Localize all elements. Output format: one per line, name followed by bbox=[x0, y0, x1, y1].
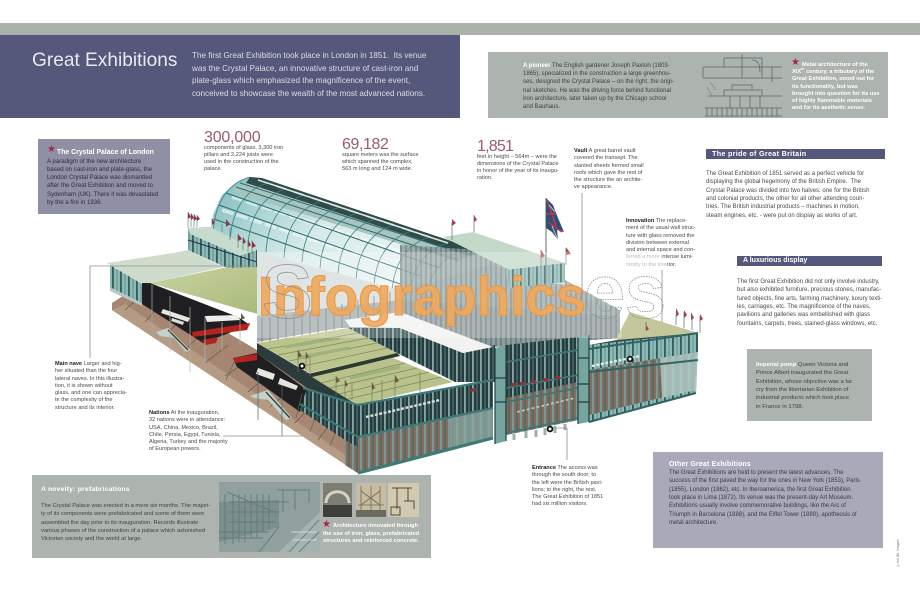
intro text: The first Great Exhibition took place in London in 1851. Its venue bbox=[192, 51, 426, 60]
wedge between roof and left interior bbox=[257, 343, 357, 405]
number: 300,000 bbox=[204, 128, 260, 146]
left wing roofs bbox=[107, 250, 258, 314]
panel text: Triumph in Barcelona (1888), and the Eiffel Tower (1889), apotheosis of bbox=[669, 512, 857, 518]
watermark text bbox=[258, 250, 666, 335]
metal architecture caption: of highly flammable materials bbox=[792, 98, 872, 104]
left tower bbox=[495, 345, 506, 444]
text: a luxurious display: fountains, carpets, trees, stained-glass windows, etc. bbox=[737, 321, 877, 327]
note: nations: USA, China, Mexico, Brazil, bbox=[149, 425, 218, 431]
note: nations: Chile, Persia, Egypt, Tunisia, bbox=[149, 432, 221, 438]
description: which spanned the complex, bbox=[342, 159, 413, 165]
panel text: (1855), London (1862), etc. In Iberoamerica, the first Great Exhibition bbox=[669, 487, 851, 493]
panel heading: The Crystal Palace of London bbox=[57, 149, 154, 156]
panel text: various phases of the construction of a palace which astonished bbox=[41, 528, 205, 534]
intro text: conceived to showcase the wealth of the most advanced nations. bbox=[192, 89, 425, 98]
panel text: Sydenham (UK). There it was devastated bbox=[47, 191, 158, 198]
stat: 69,182 bbox=[342, 136, 418, 172]
note: nations: Nations At the inauguration, bbox=[149, 410, 219, 416]
watermark text: Infographics bbox=[258, 265, 586, 327]
panel text bbox=[47, 158, 158, 206]
note: innovation bbox=[626, 218, 696, 268]
panel text bbox=[669, 470, 860, 526]
note: vault: Vault A great barrel vault bbox=[574, 148, 636, 154]
text: pride of Great Britain: Crystal Palace was divided into two halves: one for the British bbox=[706, 188, 869, 194]
description: used in the construction of the bbox=[204, 159, 279, 165]
text: pride of Great Britain: tries. The British industrial products – machines in motion, bbox=[706, 204, 860, 210]
description: 563 m long and 124 m wide. bbox=[342, 166, 412, 172]
note: innovation: ferred a more intense lumi- bbox=[626, 254, 693, 260]
left wing interior bbox=[142, 283, 250, 372]
front facade bbox=[358, 380, 493, 473]
note: main nave: tion, it is shown without bbox=[55, 383, 113, 389]
panel text: success of the first paved the way for the ones in New York (1853), Paris bbox=[669, 478, 860, 484]
pioneer text: A pioneer The English gardener Joseph Paxton (1803- bbox=[523, 63, 670, 69]
description: pillars and 2,224 joists were bbox=[204, 152, 273, 158]
panel: a novelty, prefabrications bbox=[32, 475, 431, 558]
note: vault: roofs which gave the rest of bbox=[574, 170, 642, 176]
note: main nave bbox=[55, 361, 127, 411]
note: main nave: glass, and one can apprecia- bbox=[55, 390, 127, 396]
panel text: Imperial pomp Queen Victoria and bbox=[756, 362, 848, 368]
panel text: London Crystal Palace was dismantled bbox=[47, 174, 152, 181]
note: innovation: division between external bbox=[626, 240, 689, 246]
front roof flags bbox=[241, 313, 420, 402]
metal architecture caption: Great Exhibition, stood out for bbox=[792, 76, 874, 82]
note: entrance: through the south door; to bbox=[532, 472, 596, 478]
metal architecture caption: Metal architecture of the bbox=[802, 62, 868, 68]
panel text: Victorian society and the world at large. bbox=[41, 536, 142, 542]
ground floor bbox=[112, 283, 360, 473]
note: entrance: lions; to the right, the rest. bbox=[532, 487, 596, 493]
courtyard inner facade bbox=[348, 328, 495, 382]
panel text: cry from the libertarian Exhibition of bbox=[756, 387, 848, 393]
note: vault bbox=[574, 148, 644, 190]
text: pride of Great Britain: displaying the global hegemony of the British Empire. The bbox=[706, 179, 861, 185]
centre green roof with stripes bbox=[257, 328, 453, 405]
right roof bbox=[589, 308, 703, 370]
title: Great Exhibitions bbox=[32, 50, 177, 71]
heading: a luxurious display: A luxurious display bbox=[743, 257, 807, 264]
vault bbox=[213, 177, 484, 295]
top grey band bbox=[0, 23, 920, 35]
icon: star: ★ bbox=[791, 57, 800, 68]
panel text bbox=[41, 503, 210, 542]
intro text: was the Crystal Palace, an innovative structure of cast-iron and bbox=[192, 64, 418, 73]
panel text: ty of its components were prefabricated and some of them were bbox=[41, 511, 204, 517]
header banner bbox=[0, 35, 460, 118]
note: nations: of European powers. bbox=[149, 446, 201, 452]
flag: Union Jack bbox=[546, 198, 564, 282]
panel heading: Other Great Exhibitions bbox=[669, 461, 751, 468]
left front facade bbox=[300, 388, 358, 473]
panel text: The Crystal Palace was erected in a mere six months. The majori- bbox=[41, 503, 210, 509]
leader lines bbox=[90, 193, 662, 460]
panel text: The Great Exhibitions are held to present the latest advances. The bbox=[669, 470, 844, 476]
right facade bbox=[589, 333, 698, 422]
text: a luxurious display bbox=[737, 278, 882, 327]
panel: a pioneer bbox=[488, 52, 888, 118]
pioneer text: iron architecture, later taken up by the Chicago school bbox=[523, 96, 666, 102]
heading: pride of Great Britain: The pride of Great Britain bbox=[712, 149, 806, 158]
transept section behind watermark bbox=[257, 245, 620, 347]
note: entrance: had six million visitors. bbox=[532, 501, 588, 507]
panel text: Exhibition, whose objective was a far bbox=[756, 379, 852, 385]
description: palace. bbox=[204, 166, 222, 172]
middle entrance bay bbox=[506, 337, 578, 440]
vault ridge band bbox=[246, 177, 484, 256]
note: nations: 32 nations were in attendance: bbox=[149, 417, 225, 423]
thumbnail 2 bbox=[356, 483, 386, 517]
icon: star: ★ bbox=[47, 144, 56, 155]
back left wing with flags bbox=[188, 212, 257, 268]
text: a luxurious display: les, carriages, etc. The magnificence of the naves, bbox=[737, 304, 871, 310]
note: entrance bbox=[532, 465, 603, 507]
note: innovation: ture with glass removed the bbox=[626, 233, 694, 239]
pioneer text: 1865), specialized in the construction a large greenhou- bbox=[523, 71, 671, 77]
engraving of construction bbox=[219, 482, 320, 552]
note: main nave: structure and its interior. bbox=[55, 405, 115, 411]
note: entrance: The Great Exhibition of 1851 bbox=[532, 494, 603, 500]
watermark text: S bbox=[262, 250, 313, 335]
panel text bbox=[756, 362, 852, 410]
description: feet in height – 564m – were the bbox=[477, 154, 557, 160]
pioneer text bbox=[523, 62, 674, 110]
number: 69,182 bbox=[342, 136, 389, 152]
note: main nave: her situated than the four bbox=[55, 368, 117, 374]
thumbnail 1 bbox=[323, 483, 352, 517]
small flags bbox=[541, 248, 566, 268]
panel text: after the Great Exhibition and moved to bbox=[47, 182, 153, 189]
watermark veil bbox=[257, 252, 622, 338]
heading: a luxurious display bbox=[737, 256, 882, 266]
panel heading: A novelty: prefabrications bbox=[41, 486, 130, 493]
panel text: assembled the day prior to its inauguration. Records illustrate bbox=[41, 520, 198, 526]
callout markers bbox=[300, 357, 632, 431]
thumbnail 3 bbox=[388, 483, 419, 517]
text: a luxurious display: pavilions and galleries was embellished with glass bbox=[737, 312, 870, 318]
description: in honor of the year of its inaugu- bbox=[477, 168, 559, 174]
number: 1,851 bbox=[477, 138, 513, 154]
panel text: in France in 1798. bbox=[756, 404, 803, 410]
pioneer text: nal sketches. He was the driving force behind functional bbox=[523, 88, 671, 94]
right tower bbox=[578, 335, 589, 424]
back right roof bbox=[443, 215, 571, 288]
description: ration. bbox=[477, 175, 493, 181]
panel text: Prince Albert inaugurated the Great bbox=[756, 370, 848, 376]
panel: The Crystal Palace of London bbox=[38, 139, 170, 214]
note: innovation: and internal space and con- bbox=[626, 247, 695, 253]
panel text: industrial products which took place bbox=[756, 395, 849, 401]
stat: 300,000 bbox=[204, 128, 283, 172]
metal architecture caption bbox=[792, 62, 880, 111]
text: pride of Great Britain: steam engines, etc. - were put on display as works of art. bbox=[706, 213, 857, 219]
note: nations: Algeria, Turkey and the majority bbox=[149, 439, 228, 445]
pioneer text: ses, designed the Crystal Palace – on the right, the origi- bbox=[523, 79, 674, 85]
note: main nave: lateral naves. In this illustra- bbox=[55, 376, 124, 382]
white roof strip bbox=[345, 312, 493, 353]
note: vault: the structure the an archite- bbox=[574, 177, 642, 183]
icon: star: ★ bbox=[322, 519, 331, 530]
panel text: Exhibitions usually involve commemorative buildings, like the Arc of bbox=[669, 503, 846, 509]
description: square meters was the surface bbox=[342, 152, 418, 158]
note: vault: covered the transept. The bbox=[574, 155, 638, 161]
note: entrance: Entrance The access was bbox=[532, 465, 598, 471]
icon: Paxton sketches bbox=[702, 54, 782, 116]
text: pride of Great Britain: The Great Exhibition of 1851 served as a perfect vehicle for bbox=[706, 171, 864, 177]
left front interior bbox=[226, 353, 340, 446]
metal architecture caption: its functionality, but was bbox=[792, 84, 858, 90]
text: pride of Great Britain bbox=[706, 170, 870, 219]
intro text bbox=[192, 51, 426, 98]
description bbox=[477, 154, 559, 181]
heading: pride of Great Britain bbox=[706, 149, 885, 159]
note: innovation: nosity to the interior. bbox=[626, 262, 676, 268]
image credit: ©Ink IM. Images bbox=[896, 539, 900, 567]
intro text: plate-glass which emphasized the magnificence of the event, bbox=[192, 76, 410, 85]
metal architecture caption: brought into question for its use bbox=[792, 91, 880, 97]
note: main nave: te the complexity of the bbox=[55, 397, 113, 403]
panel text: based on cast-iron and plate-glass, the bbox=[47, 166, 152, 173]
pioneer text: and Bauhaus. bbox=[523, 104, 560, 110]
note: entrance: the left were the British pavi- bbox=[532, 480, 603, 486]
note: innovation: Innovation The replace- bbox=[626, 218, 687, 224]
text: pride of Great Britain: and colonial products, the other for all other attending coun- bbox=[706, 196, 864, 202]
metal architecture caption: XIXth century, a tributary of the bbox=[792, 67, 874, 75]
panel: other Great Exhibitions bbox=[653, 452, 883, 548]
note: nations bbox=[149, 410, 228, 452]
panel text: metal architecture. bbox=[669, 520, 718, 526]
stat: 1,851 bbox=[477, 138, 559, 181]
note: innovation: ment of the usual wall struc- bbox=[626, 225, 696, 231]
caption: structures and reinforced concrete. bbox=[323, 538, 419, 544]
caption: Architecture innovated through bbox=[333, 523, 418, 529]
description bbox=[342, 152, 418, 172]
watermark text: es bbox=[584, 250, 666, 335]
note: vault: ve appearance. bbox=[574, 184, 613, 190]
caption: the use of iron, glass, prefabricated bbox=[323, 530, 419, 536]
text: a luxurious display: The first Great Exhibition did not only involve industry, bbox=[737, 279, 880, 285]
description: components of glass, 3,300 iron bbox=[204, 144, 283, 150]
description: dimensions of the Crystal Palace bbox=[477, 161, 558, 167]
caption bbox=[323, 523, 419, 544]
panel: imperial pomp bbox=[747, 349, 872, 421]
panel text: by the a fire in 1936. bbox=[47, 199, 102, 206]
panel text: A paradigm of the new architecture bbox=[47, 158, 141, 164]
description bbox=[204, 144, 283, 172]
note: vault: slanted sheets formed small bbox=[574, 163, 644, 169]
panel text: took place in Lima (1872). Its venue was the present-day Art Museum. bbox=[669, 495, 853, 501]
note: main nave: Main nave Larger and hig- bbox=[55, 361, 122, 367]
text: a luxurious display: but also exhibited furniture, precious stones, manufac- bbox=[737, 287, 881, 293]
metal architecture caption: and for its aesthetic sense. bbox=[792, 105, 865, 111]
text: a luxurious display: tured objects, fine arts, farming machinery, luxury texti- bbox=[737, 296, 882, 302]
